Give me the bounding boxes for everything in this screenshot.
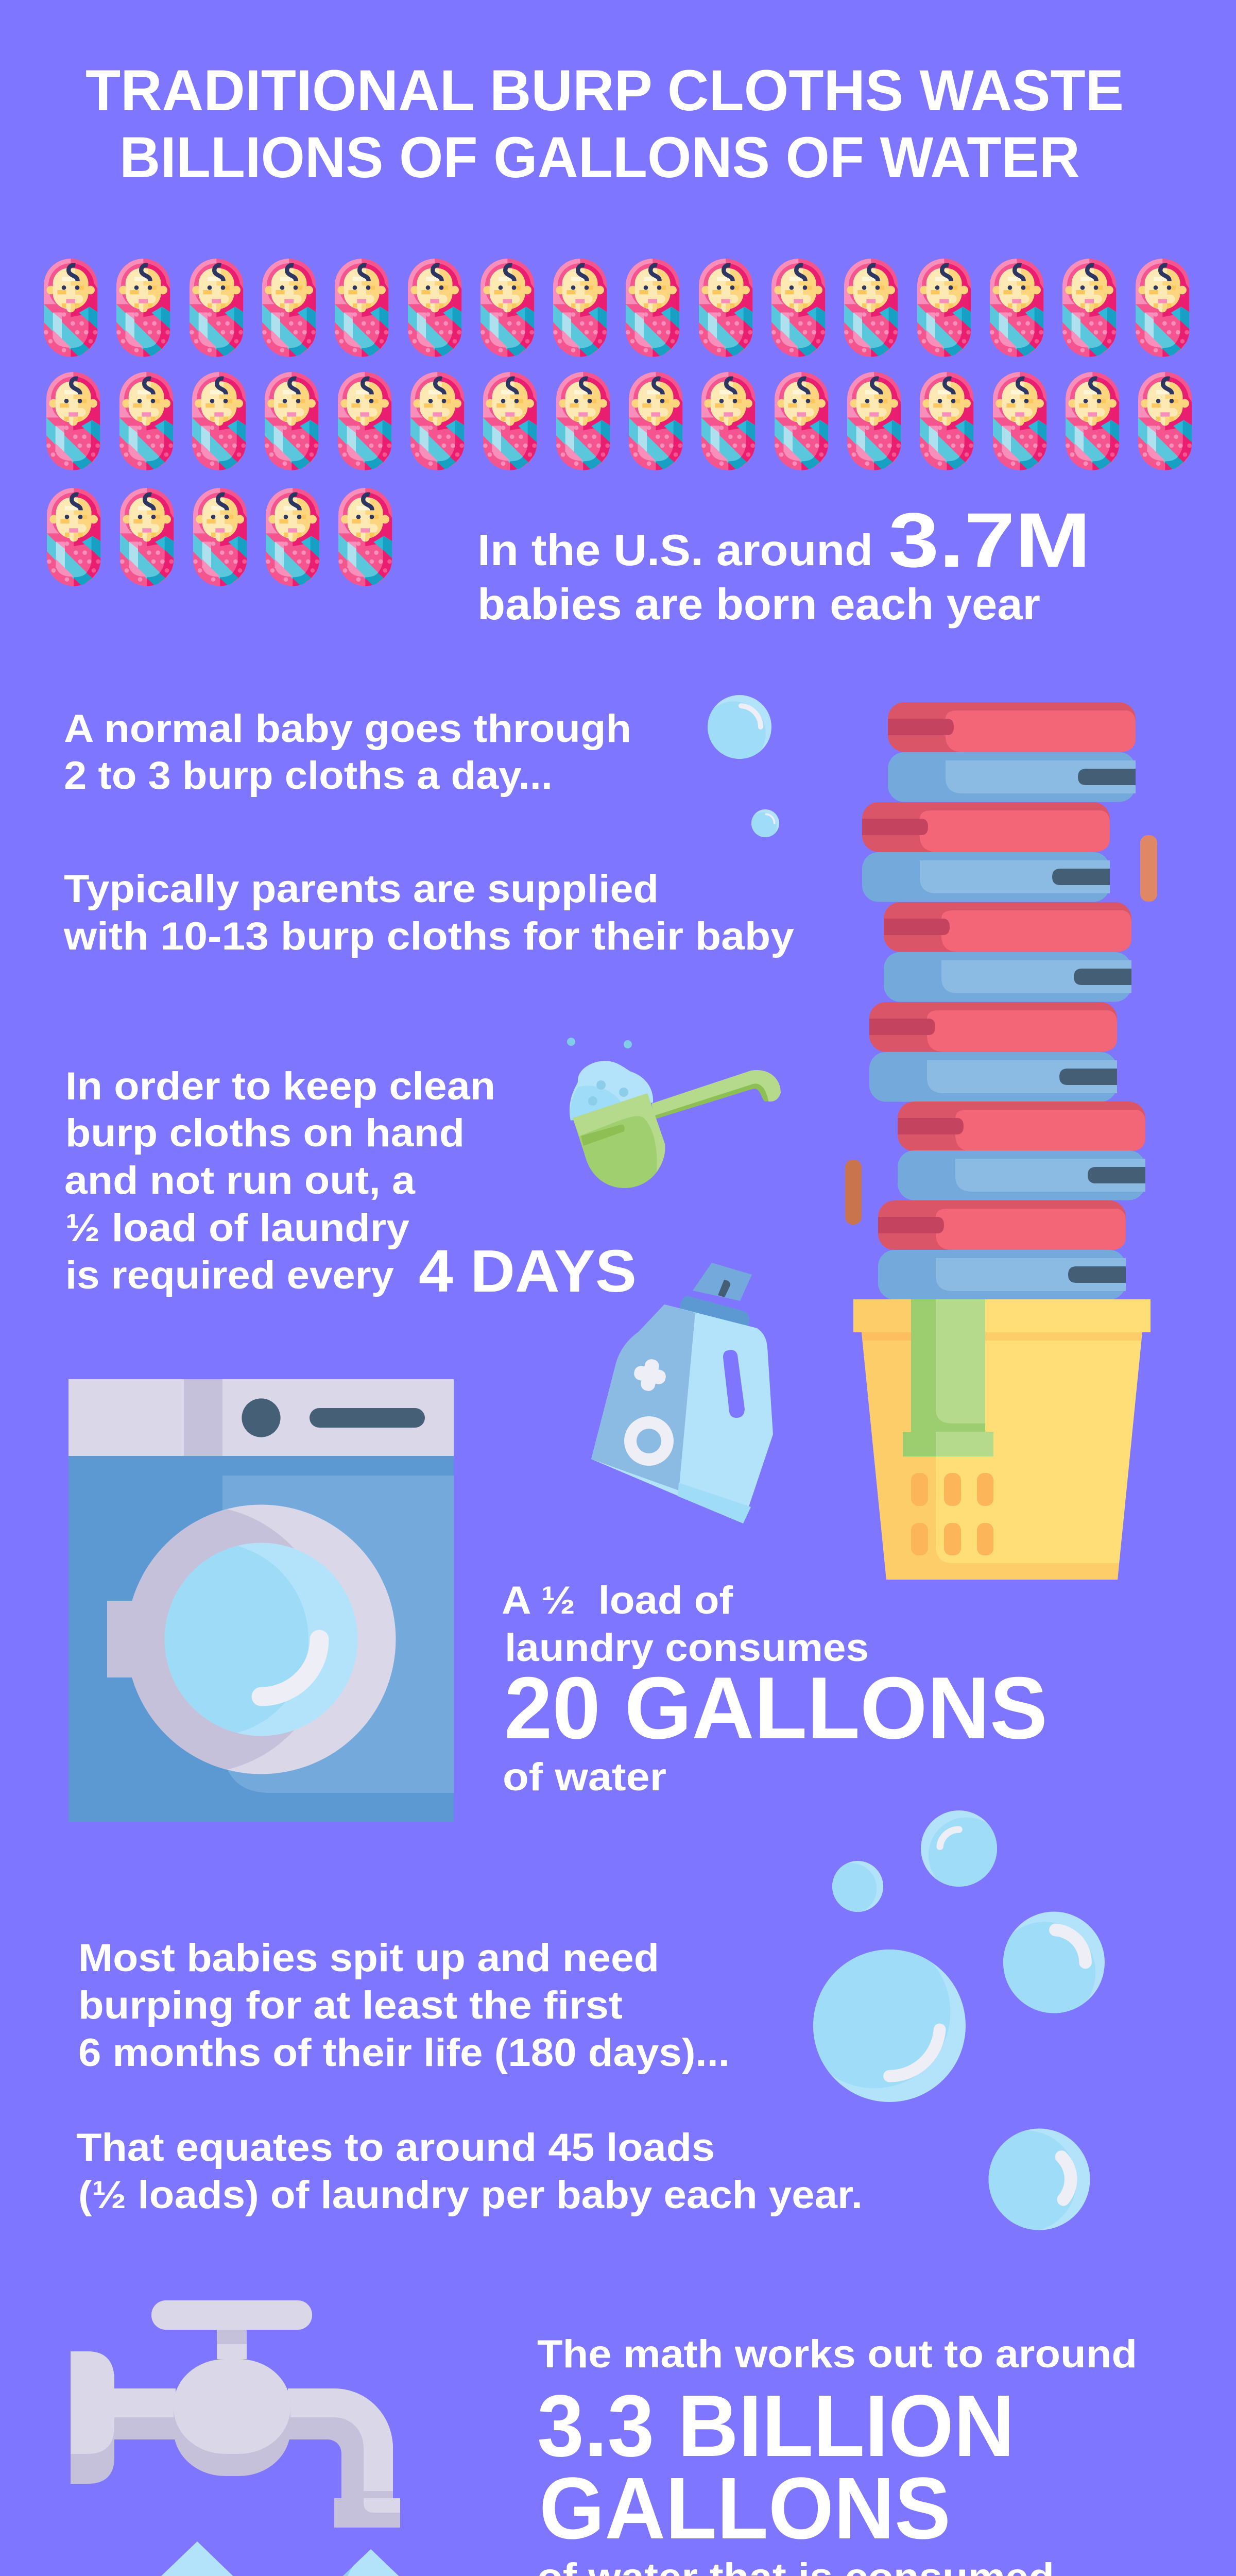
text: half load every 4 days: and not run out, a [64, 1159, 416, 1202]
text: half load every 4 days: 4 DAYS [419, 1238, 637, 1304]
icon: top bubbles [702, 695, 779, 840]
text: half load uses 20 gallons: of water [503, 1755, 666, 1799]
text: burp cloths per day [64, 707, 631, 798]
icon: stack of towels [862, 702, 1145, 1299]
text: 3.3 billion gallons: GALLONS [539, 2460, 951, 2557]
text: burp cloths per day: 2 to 3 burp cloths a day... [64, 754, 553, 798]
text: half load every 4 days: ½ load of laundry [65, 1206, 409, 1250]
text: 3.3 billion gallons: The math works out to around [537, 2332, 1137, 2376]
text: half load every 4 days: In order to keep clean [65, 1064, 495, 1108]
text: 3.3 billion gallons [537, 2332, 1137, 2576]
text: burp cloths supplied: Typically parents are supplied [64, 867, 659, 911]
stat: 3.7M babies born each year: babies are born each year [477, 580, 1040, 629]
stat: 3.7M babies born each year [477, 497, 1091, 629]
icon grid: swaddled babies [44, 259, 1192, 587]
text: half load uses 20 gallons: laundry consumes [505, 1626, 869, 1670]
title: TRADITIONAL BURP CLOTHS WASTE [85, 58, 1124, 123]
stat: 3.7M babies born each year: In the U.S. around [477, 526, 873, 575]
text: six months of burping: burping for at least the first [78, 1984, 623, 2027]
text: half load every 4 days: burp cloths on hand [65, 1111, 465, 1155]
title: BILLIONS OF GALLONS OF WATER [119, 125, 1080, 190]
icon: orange clothes pegs [845, 835, 1157, 1225]
text: 3.3 billion gallons: 3.3 BILLION [537, 2377, 1015, 2475]
icon: water drops [91, 2541, 471, 2576]
icon: water faucet [71, 2300, 400, 2528]
text: 45 loads per baby: That equates to around 45 loads [76, 2126, 715, 2170]
text: half load uses 20 gallons [502, 1579, 1048, 1799]
icon: detergent bottle [591, 1263, 773, 1523]
text: burp cloths supplied [63, 867, 794, 958]
text: six months of burping: Most babies spit up and need [78, 1936, 659, 1980]
text: burp cloths supplied: with 10-13 burp cloths for their baby [63, 914, 794, 958]
icon: detergent scoop [567, 1038, 781, 1188]
text: 45 loads per baby: (½ loads) of laundry per baby each year. [78, 2173, 863, 2217]
icon: laundry basket [853, 1299, 1151, 1580]
text: half load every 4 days: is required every [65, 1253, 394, 1297]
text: burp cloths per day: A normal baby goes through [64, 707, 631, 751]
icon: middle bubbles [798, 1810, 1111, 2259]
text: 45 loads per baby [76, 2126, 863, 2217]
title [85, 58, 1124, 190]
stat: 3.7M babies born each year: 3.7M [888, 497, 1091, 583]
text: six months of burping [78, 1936, 730, 2075]
text: half load uses 20 gallons: 20 GALLONS [504, 1659, 1048, 1757]
icon: washing machine [62, 1379, 454, 1822]
text: half load uses 20 gallons: A ½ load of [502, 1579, 733, 1622]
text: half load every 4 days [64, 1064, 637, 1304]
text: six months of burping: 6 months of their life (180 days)... [78, 2031, 730, 2075]
